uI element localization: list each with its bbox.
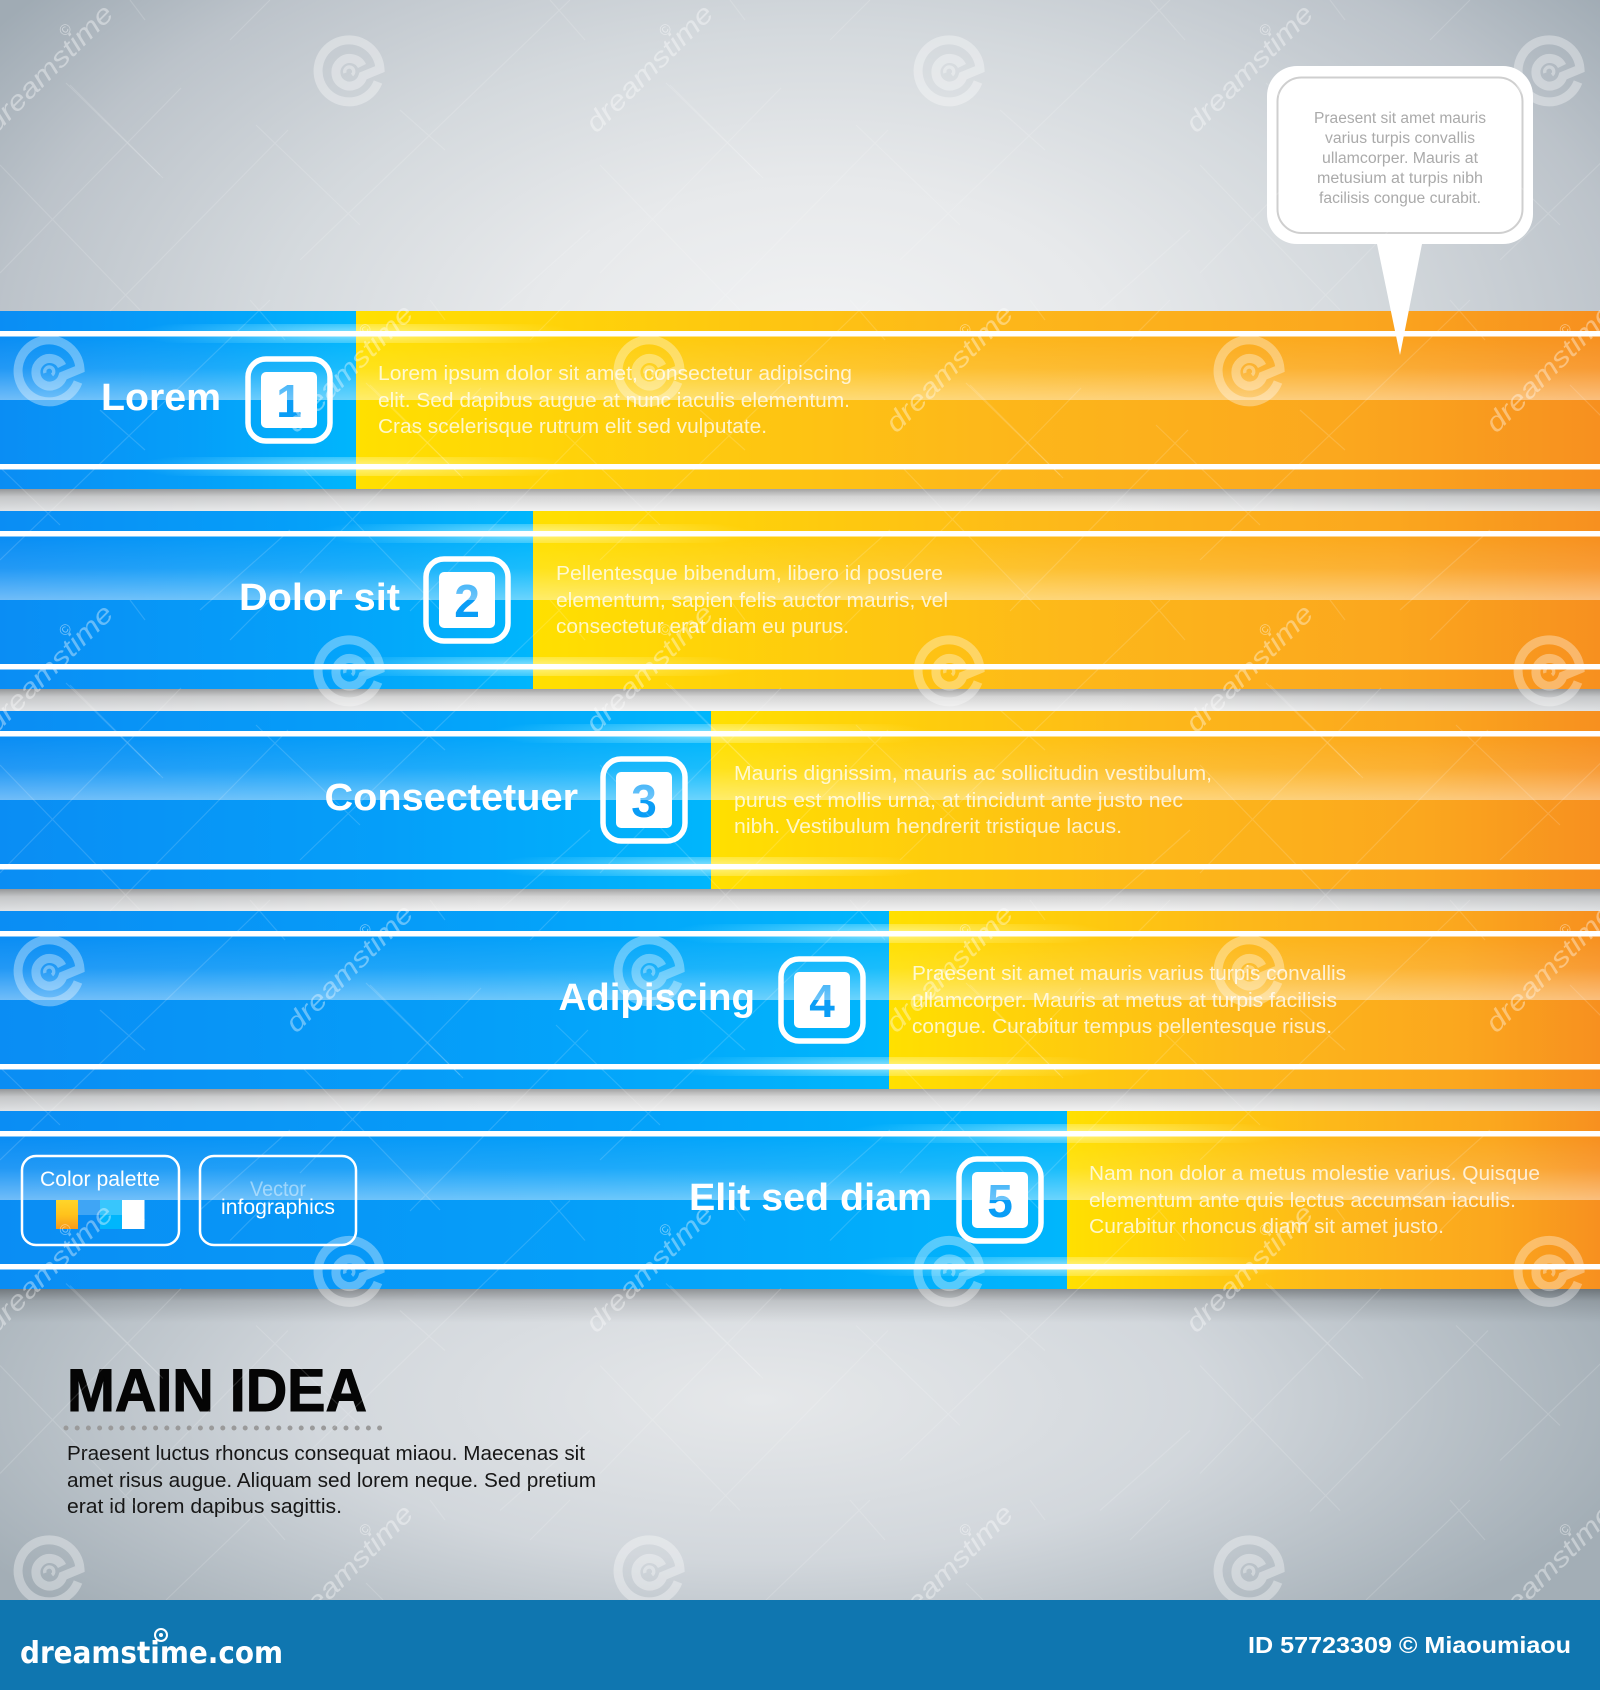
callout bubble: ullamcorper. Mauris at	[1322, 150, 1479, 167]
watermark pattern: dreamstime	[1179, 0, 1319, 138]
band 4: 4	[809, 975, 835, 1027]
band 2: elementum, sapien felis auctor mauris, vel	[556, 590, 948, 612]
band 5: Nam non dolor a metus molestie varius. Quisque	[1089, 1163, 1540, 1185]
watermark pattern: dreamstime	[879, 1498, 1019, 1638]
watermark pattern: dreamstime	[279, 1498, 419, 1638]
watermark pattern: dreamstime	[879, 298, 1019, 438]
band 1: 1	[276, 375, 302, 427]
footer image id: ID 57723309 © Miaoumiaou	[1248, 1632, 1571, 1658]
band 5: Elit sed diam	[689, 1177, 932, 1219]
watermark pattern: dreamstime	[1479, 898, 1600, 1038]
band 2: 2	[454, 575, 480, 627]
callout bubble: Praesent sit amet mauris	[1314, 110, 1486, 127]
band 1: Lorem ipsum dolor sit amet, consectetur adipiscing	[378, 363, 852, 385]
band 4: Adipiscing	[558, 977, 755, 1019]
watermark pattern: ©	[656, 20, 676, 40]
band 3: Mauris dignissim, mauris ac sollicitudin vestibulum,	[734, 763, 1212, 785]
callout bubble: varius turpis convallis	[1325, 130, 1475, 147]
watermark pattern: dreamstime	[579, 1198, 719, 1338]
palette box	[22, 1156, 179, 1245]
band 3	[0, 711, 1600, 911]
footer bar	[0, 1600, 1600, 1690]
band 4	[0, 911, 1600, 1111]
band 5: 5	[987, 1175, 1013, 1227]
watermark pattern: ©	[1256, 1220, 1276, 1240]
watermark pattern: ©	[356, 320, 376, 340]
band 4: ullamcorper. Mauris at metus at turpis facilisis	[912, 990, 1337, 1012]
palette box: Color palette	[40, 1168, 160, 1191]
main idea paragraph: amet risus augue. Aliquam sed lorem neque. Sed pretium	[67, 1470, 596, 1492]
band 2: Dolor sit	[239, 577, 400, 619]
watermark pattern: dreamstime	[1179, 1198, 1319, 1338]
band 3: nibh. Vestibulum hendrerit tristique lacus.	[734, 816, 1122, 838]
watermark pattern: ©	[356, 920, 376, 940]
band 2: consectetur erat diam eu purus.	[556, 616, 849, 638]
watermark pattern: ©	[56, 620, 76, 640]
main idea paragraph	[67, 1443, 596, 1518]
band 3: 3	[631, 775, 657, 827]
watermark pattern: dreamstime	[579, 0, 719, 138]
band 5: Curabitur rhoncus diam sit amet justo.	[1089, 1216, 1444, 1238]
watermark pattern: dreamstime	[1479, 298, 1600, 438]
callout bubble: facilisis congue curabit.	[1319, 190, 1481, 207]
band 5	[0, 1111, 1600, 1323]
watermark pattern: ©	[656, 620, 676, 640]
watermark pattern: ©	[956, 1520, 976, 1540]
watermark pattern: dreamstime	[579, 598, 719, 738]
watermark pattern: ©	[56, 1220, 76, 1240]
watermark pattern: dreamstime	[1179, 598, 1319, 738]
watermark pattern: ©	[1556, 920, 1576, 940]
band 1: Cras scelerisque rutrum elit sed vulputate.	[378, 416, 767, 438]
band 1: elit. Sed dapibus augue at nunc iaculis elementum.	[378, 390, 850, 412]
band 2: Pellentesque bibendum, libero id posuere	[556, 563, 943, 585]
band 5: elementum ante quis lectus accumsan iaculis.	[1089, 1190, 1516, 1212]
main idea paragraph: erat id lorem dapibus sagittis.	[67, 1496, 342, 1518]
vector infographics box	[200, 1156, 356, 1245]
band 4: Praesent sit amet mauris varius turpis convallis	[912, 963, 1346, 985]
watermark pattern: ©	[1256, 20, 1276, 40]
watermark pattern: ©	[1256, 620, 1276, 640]
watermark pattern: ©	[956, 920, 976, 940]
watermark pattern: dreamstime	[279, 298, 419, 438]
band 4: congue. Curabitur tempus pellentesque risus.	[912, 1016, 1332, 1038]
vector infographics box: infographics	[221, 1196, 335, 1219]
main idea paragraph: Praesent luctus rhoncus consequat miaou. Maecenas sit	[67, 1443, 585, 1465]
watermark pattern: ©	[1556, 320, 1576, 340]
callout bubble	[1267, 66, 1533, 355]
band 3: Consectetuer	[324, 777, 578, 819]
watermark pattern: dreamstime	[879, 898, 1019, 1038]
band 3: purus est mollis urna, at tincidunt ante justo nec	[734, 790, 1183, 812]
watermark pattern: ©	[356, 1520, 376, 1540]
watermark pattern: ©	[56, 20, 76, 40]
main idea heading: MAIN IDEA	[67, 1357, 367, 1424]
watermark pattern: dreamstime	[1479, 1498, 1600, 1638]
watermark pattern: dreamstime	[279, 898, 419, 1038]
watermark pattern: ©	[956, 320, 976, 340]
watermark pattern: ©	[656, 1220, 676, 1240]
band 1: Lorem	[101, 377, 221, 419]
band 2	[0, 511, 1600, 711]
footer logo: dreamstime.com	[20, 1636, 283, 1671]
vector infographics box: Vector	[250, 1178, 306, 1201]
band 1	[0, 311, 1600, 511]
callout bubble: metusium at turpis nibh	[1317, 170, 1483, 187]
watermark pattern: ©	[1556, 1520, 1576, 1540]
